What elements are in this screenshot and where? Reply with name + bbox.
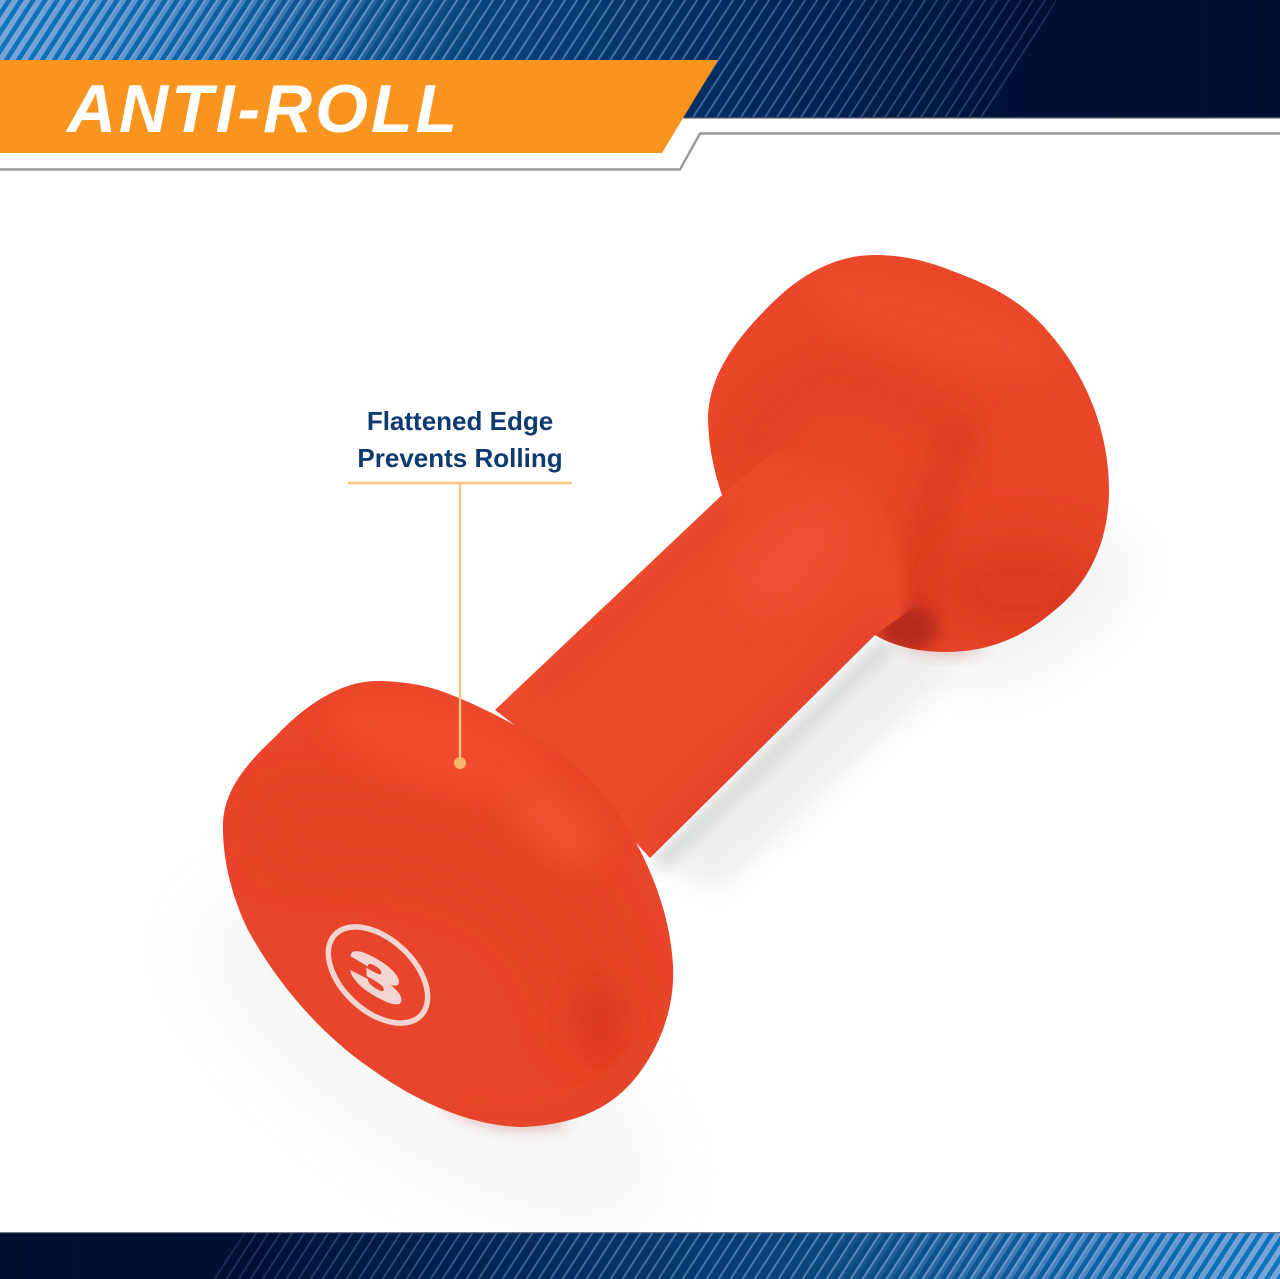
callout heading line one: Flattened Edge <box>367 406 553 436</box>
title: ANTI-ROLL <box>65 71 457 147</box>
near weight head <box>222 681 674 1127</box>
weight badge: number 3 in ellipse: 3 <box>349 934 404 1021</box>
far weight head <box>708 255 1109 652</box>
callout: flattened edge <box>348 406 572 769</box>
callout leader line <box>348 483 572 769</box>
dumbbell product image <box>222 255 1115 1156</box>
orange title banner <box>0 60 718 153</box>
footer band: striped blue gradient <box>0 1232 1280 1279</box>
weight badge: number 3 in ellipse <box>310 908 446 1042</box>
header outline stroke <box>0 134 1280 170</box>
handle <box>495 466 912 858</box>
header band: striped blue gradient <box>0 0 1280 118</box>
callout heading line two: Prevents Rolling <box>357 443 563 473</box>
floor shadows <box>149 506 1159 1279</box>
